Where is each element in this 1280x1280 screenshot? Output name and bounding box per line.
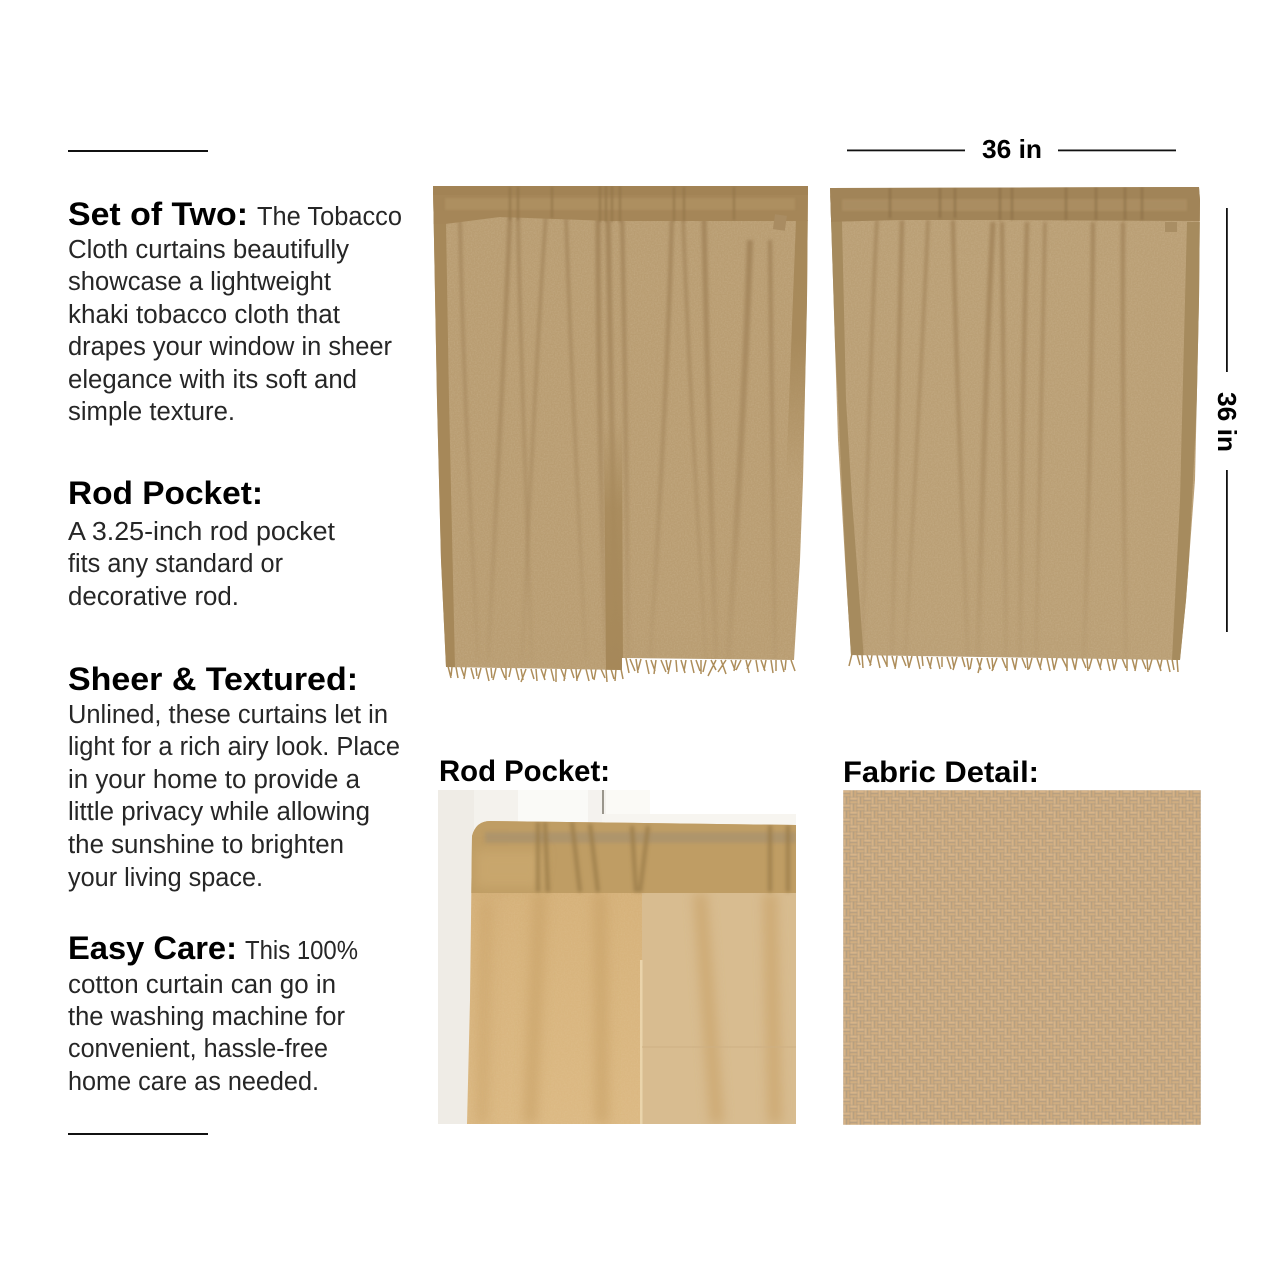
- text block: Sheer and Textured: Unlined, these curtains let in: [68, 701, 388, 729]
- text block: Rod Pocket: A 3.25-inch rod pocket: [68, 518, 335, 546]
- label: Rod Pocket: Rod Pocket:: [439, 755, 610, 788]
- left curtain folds: [458, 218, 775, 596]
- left curtain rod pocket band: [430, 184, 812, 224]
- curtain in close-up: [460, 818, 802, 1128]
- close-up greyer right panel: [642, 893, 802, 1128]
- bottom divider line: [68, 1133, 208, 1135]
- photo: left curtain panel: [430, 184, 812, 682]
- text block: Set of Two: khaki tobacco cloth that: [68, 301, 340, 329]
- text block: Rod Pocket: Rod Pocket:: [68, 475, 263, 511]
- close-up rod pocket band: [460, 818, 800, 893]
- text block: Set of Two: Cloth curtains beautifully: [68, 236, 349, 264]
- text block: Easy Care: convenient, hassle-free: [68, 1035, 328, 1063]
- right curtain rod pocket band: [826, 184, 1204, 222]
- width dimension: 36 in: 36 in: [982, 134, 1042, 164]
- text block: Easy Care: Easy Care:: [68, 930, 237, 966]
- window and wall background: [438, 790, 796, 1124]
- right curtain fringe: [849, 654, 1178, 673]
- text block: Set of Two: [68, 196, 402, 426]
- right curtain fabric: [826, 184, 1204, 664]
- text block: Easy Care: home care as needed.: [68, 1068, 319, 1096]
- text block: Sheer and Textured: little privacy while allowing: [68, 798, 370, 826]
- height dimension: 36 in: 36 in: [1212, 392, 1242, 452]
- close-up folds: [482, 893, 775, 1124]
- label: Fabric Detail: Fabric Detail:: [843, 756, 1039, 789]
- text block: Set of Two: showcase a lightweight: [68, 268, 331, 296]
- photo: rod pocket close-up: [438, 790, 802, 1128]
- text block: Easy Care: This 100%: [245, 937, 358, 965]
- text block: Set of Two: elegance with its soft and: [68, 366, 357, 394]
- text block: Easy Care: cotton curtain can go in: [68, 971, 336, 999]
- text block: Easy Care: the washing machine for: [68, 1003, 346, 1031]
- text block: Rod Pocket: [68, 475, 335, 611]
- text block: Sheer and Textured: in your home to provide a: [68, 766, 361, 794]
- left curtain fabric: [430, 184, 812, 674]
- close-up window seam: [640, 960, 642, 1124]
- right curtain folds: [864, 220, 1126, 596]
- text block: Set of Two: drapes your window in sheer: [68, 333, 393, 361]
- text block: Easy Care: [68, 930, 358, 1096]
- text block: Sheer and Textured: your living space.: [68, 864, 263, 892]
- text block: Sheer and Textured: Sheer & Textured:: [68, 661, 358, 697]
- text block: Sheer and Textured: the sunshine to brighten: [68, 831, 344, 859]
- text block: Rod Pocket: decorative rod.: [68, 583, 239, 611]
- right curtain hems: [830, 196, 864, 656]
- text block: Set of Two: simple texture.: [68, 398, 235, 426]
- text block: Sheer and Textured: [68, 661, 400, 892]
- text block: Rod Pocket: fits any standard or: [68, 550, 283, 578]
- text block: Set of Two: The Tobacco: [257, 203, 402, 231]
- photo: fabric weave detail: [843, 790, 1201, 1125]
- left curtain hems: [433, 194, 455, 668]
- left curtain fringe: [448, 658, 795, 682]
- photo: right curtain panel: [826, 184, 1204, 673]
- text block: Set of Two: Set of Two:: [68, 196, 248, 232]
- text block: Sheer and Textured: light for a rich airy look. Place: [68, 733, 400, 761]
- top divider line: [68, 150, 208, 152]
